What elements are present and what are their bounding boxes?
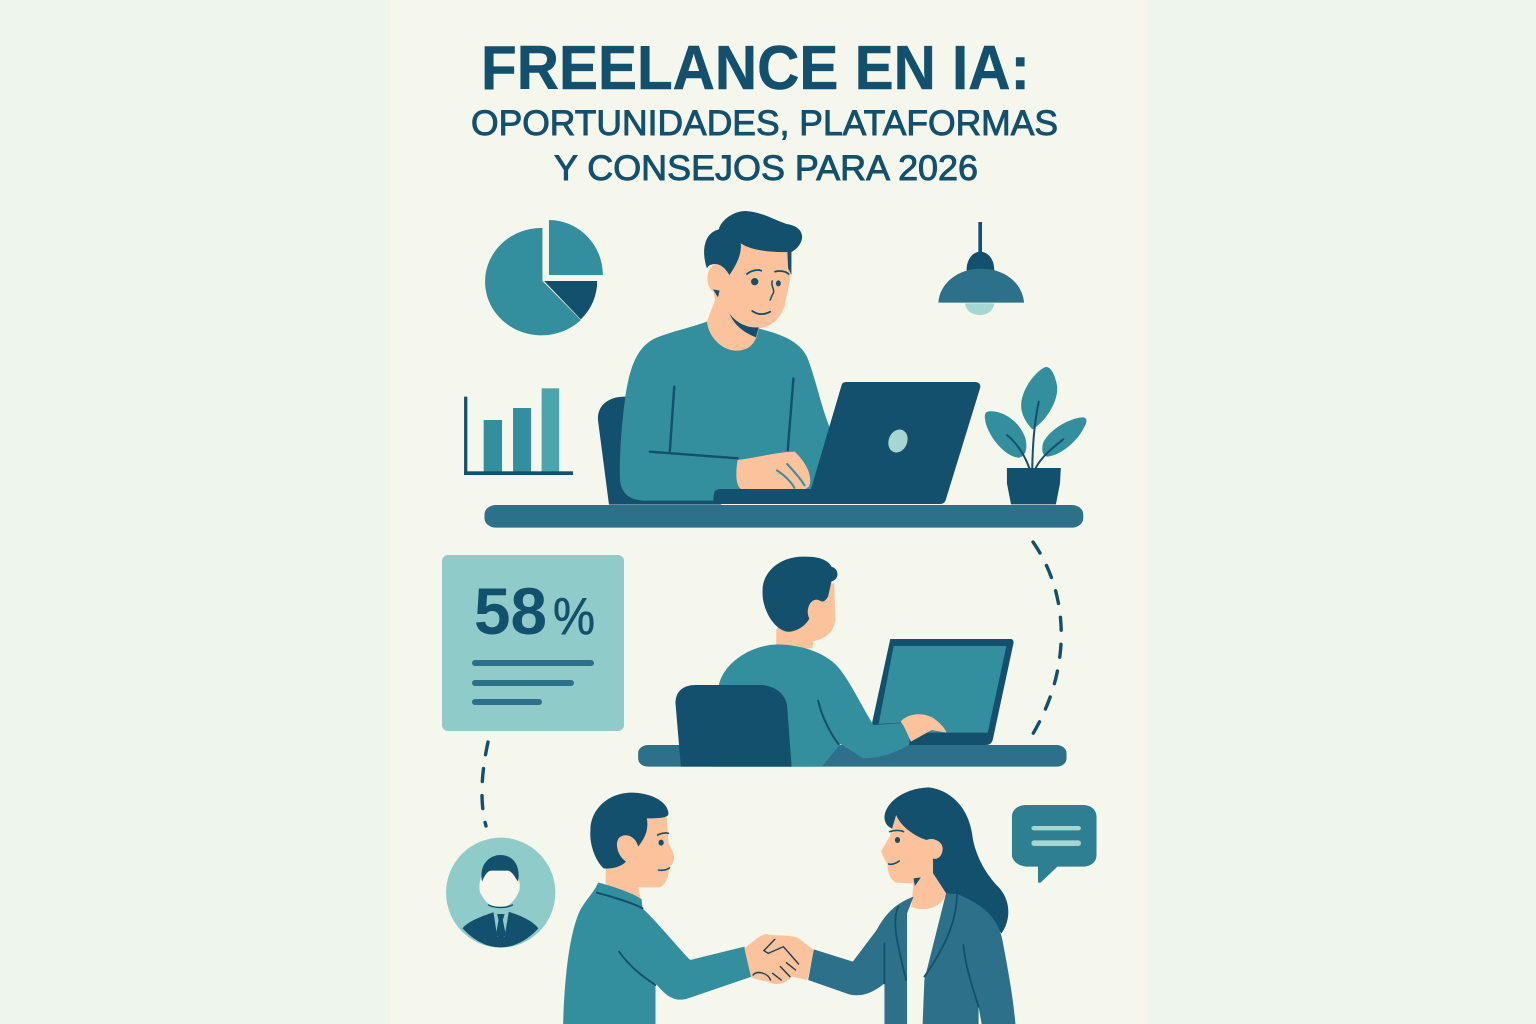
dashed connector left	[482, 742, 488, 826]
desk	[638, 745, 1067, 767]
freelancer	[620, 211, 829, 501]
stat card: 58%: %	[553, 588, 595, 646]
potted plant	[985, 367, 1086, 504]
chair	[598, 397, 721, 505]
stat card: 58%: 58	[474, 574, 547, 648]
bar chart	[464, 388, 573, 475]
scene: freelancer at desk	[464, 211, 1086, 528]
laptop	[713, 382, 980, 504]
stat card: 58%	[442, 555, 624, 731]
desk	[484, 505, 1083, 528]
title: Y CONSEJOS PARA 2026	[554, 149, 978, 188]
title	[471, 34, 1058, 188]
clasped hands	[744, 934, 814, 984]
title: FREELANCE EN IA:	[481, 34, 1030, 103]
pendant lamp	[938, 222, 1024, 315]
chair	[675, 685, 792, 767]
avatar circle	[446, 838, 555, 948]
dashed connector right	[1031, 542, 1061, 737]
person	[712, 557, 946, 767]
title: OPORTUNIDADES, PLATAFORMAS	[471, 104, 1058, 143]
scene: freelancer seen from behind	[638, 557, 1067, 767]
laptop	[872, 639, 1014, 745]
man	[563, 793, 752, 1024]
scene: handshake	[446, 787, 1097, 1024]
speech bubble	[1012, 805, 1097, 883]
pie chart	[485, 220, 603, 335]
woman	[808, 787, 1015, 1024]
